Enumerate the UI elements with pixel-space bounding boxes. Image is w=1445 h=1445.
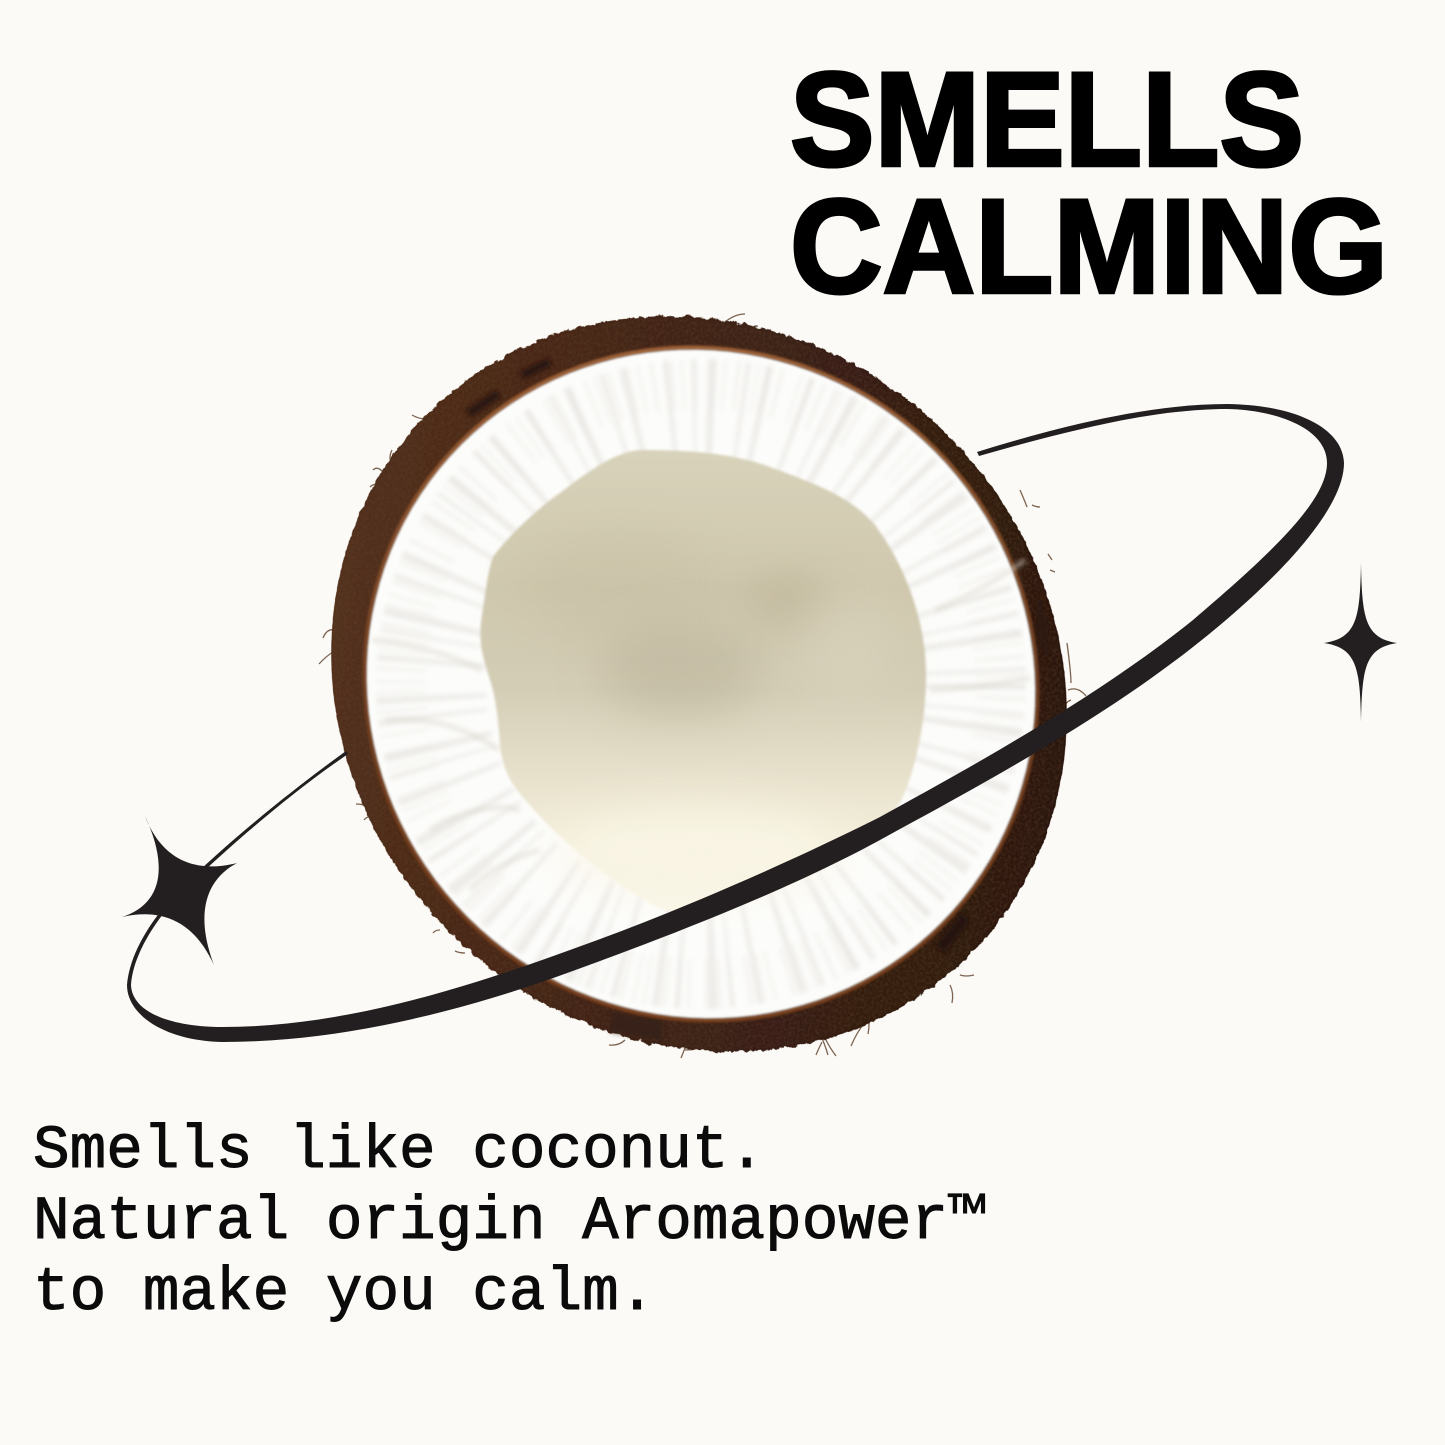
inner cavity [480, 450, 926, 913]
description text: to make you calm. [33, 1259, 655, 1328]
cream lower cavity glow [560, 810, 840, 890]
cavity shading [520, 530, 895, 715]
title: CALMING [790, 172, 1388, 322]
coconut half [179, 164, 1219, 1204]
husk ring [179, 164, 1219, 1204]
icon: large four-point star [122, 816, 237, 965]
coconut husk fibres [319, 314, 1086, 1058]
title: SMELLS [790, 46, 1304, 194]
title [790, 46, 1388, 322]
copper inner rim [225, 208, 1177, 1160]
white coconut flesh [228, 211, 1174, 1157]
description text: Smells like coconut. [33, 1117, 765, 1186]
dark patches on husk [466, 358, 1050, 1040]
description text [33, 1117, 985, 1328]
description text: Natural origin Aromapower™ [33, 1188, 985, 1257]
flesh radial fibres [401, 384, 1001, 984]
icon: small four-point star [1324, 563, 1397, 722]
husk texture [182, 167, 1216, 1201]
orbit ring [127, 404, 1344, 1042]
flesh folds [372, 560, 1030, 890]
